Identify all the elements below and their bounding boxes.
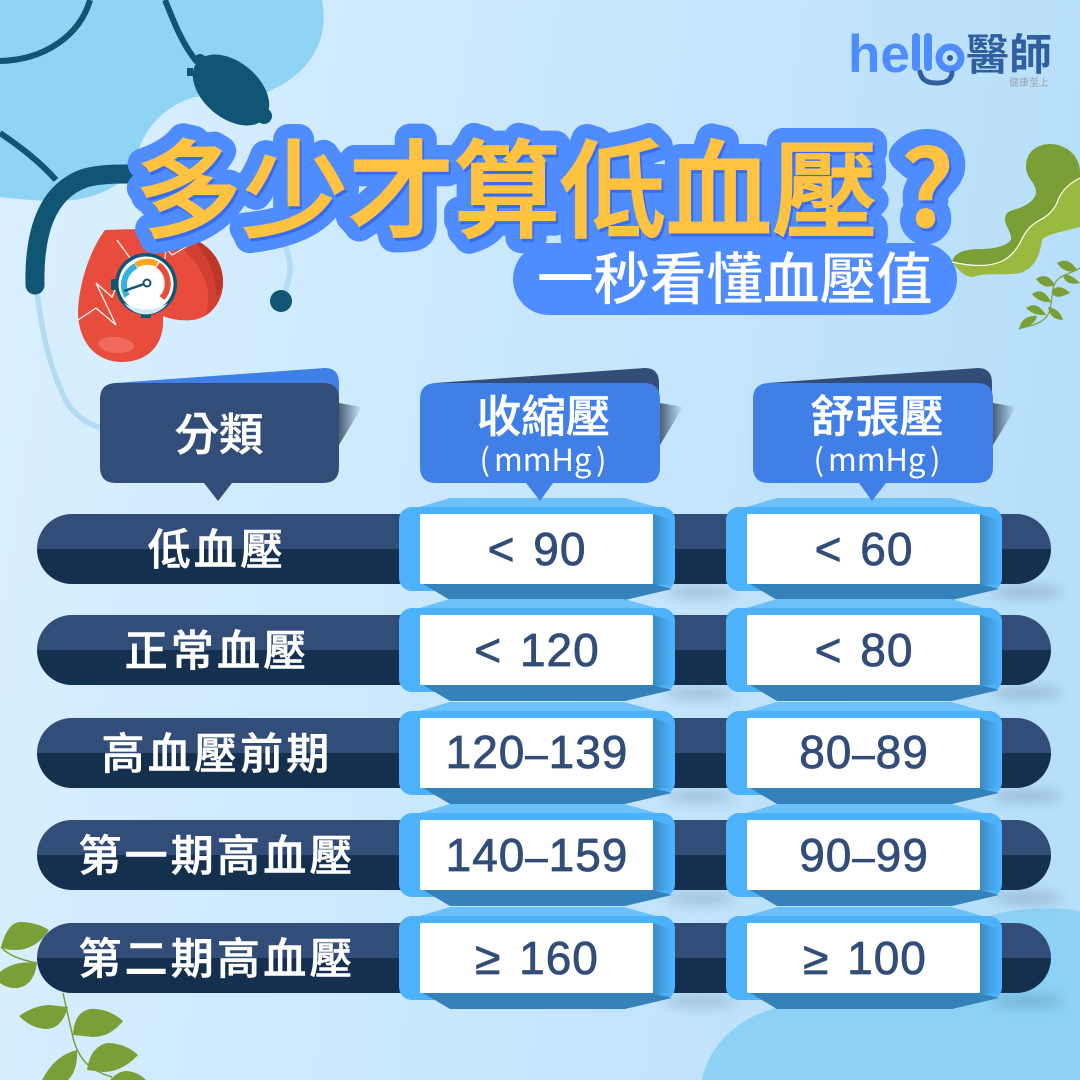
header: systolic [420,368,683,501]
subtitle pill: 一秒看懂血壓值 [537,234,932,316]
main title: 多少才算低血壓 [136,106,878,260]
logo: 健康至上 [1009,74,1049,89]
row bar 5 [37,923,1051,993]
row bar 3 [37,718,1051,788]
header: systolic: 收縮壓 [477,380,610,445]
header: category: 分類 [174,398,264,463]
main title: ? [900,104,954,258]
values: systolic: 120–139 [446,726,628,778]
values: diastolic: 90–99 [799,829,929,881]
header: diastolic [753,368,1016,501]
background blob: bottom right [702,908,1080,1080]
table rows [37,514,1051,993]
header: diastolic: 舒張壓 [810,380,944,445]
row labels [78,516,356,987]
icon: heart with pressure gauge [78,228,223,362]
logo [848,21,1052,89]
values: systolic: 140–159 [446,829,628,881]
logo: he [848,25,910,84]
values: systolic [446,523,628,984]
values: systolic: < 90 [488,523,586,575]
background blob: top left [0,0,324,201]
row bar 4 [37,820,1051,890]
values: diastolic: < 60 [815,523,913,575]
values: systolic: < 120 [474,624,600,676]
row labels: 低血壓 [148,516,286,578]
decoration: bottom left leaves [0,922,146,1080]
row bar 2 [37,615,1051,685]
main title: 多少才算低血壓 [136,106,878,260]
row labels: 第一期高血壓 [78,822,356,884]
logo: 醫師 [966,21,1052,83]
header: diastolic: (mmHg) [814,435,940,480]
header: systolic: (mmHg) [480,435,606,480]
main title: ? [900,104,954,258]
stethoscope illustration [0,0,292,428]
icon: pump bulb [179,40,283,140]
values: diastolic: 80–89 [799,726,929,778]
row bar 1 [37,514,1051,584]
decoration: green wave [952,144,1080,277]
decoration: top right leaves [1019,261,1080,329]
values: diastolic: < 80 [815,624,913,676]
value boxes [399,498,1063,1009]
row labels: 高血壓前期 [102,720,332,782]
values: diastolic [799,523,929,984]
row labels: 正常血壓 [125,617,309,679]
main title: 多少才算低血壓 [138,109,880,263]
values: diastolic: ≥ 100 [803,932,927,984]
row labels: 第二期高血壓 [78,925,356,987]
header: category [100,368,362,501]
values: systolic: ≥ 160 [475,932,599,984]
main title: ? [902,107,956,261]
